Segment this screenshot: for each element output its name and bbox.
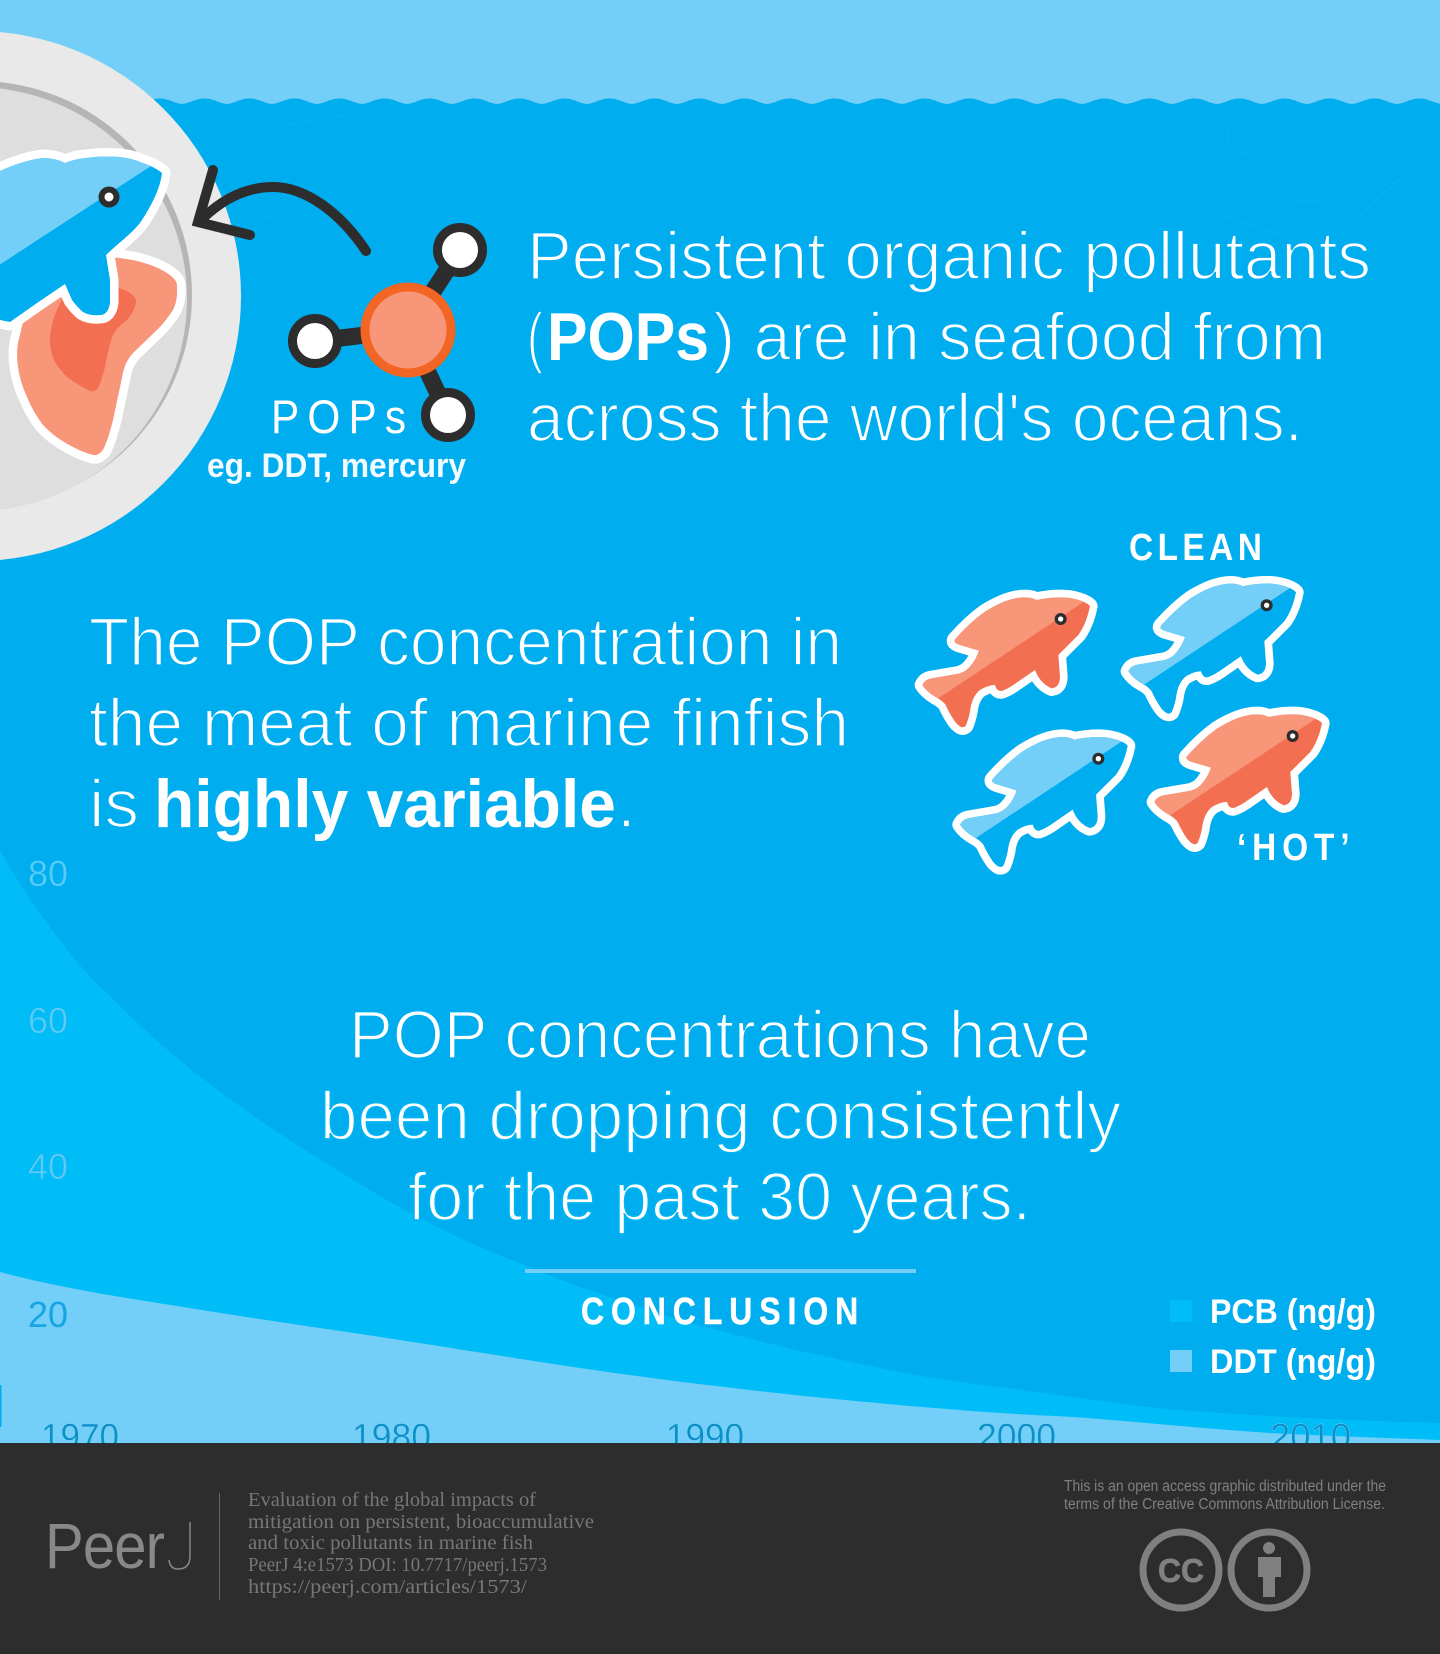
text block: highly variable: highly variable [154,766,616,842]
text block: dropping concentrations: been dropping consistently [320,1078,1121,1154]
license note [1064,1478,1386,1513]
text block: highly variable: . [617,766,636,842]
y axis labels: 40 [28,1146,68,1187]
citation: PeerJ 4:e1573 DOI: 10.7717/peerj.1573 [248,1554,547,1576]
legend DDT swatch [1170,1350,1192,1372]
plate inner shadow [0,81,192,509]
footer divider [219,1493,220,1600]
text block: highly variable: is [89,766,139,842]
icon: attribution person [1231,1532,1307,1608]
legend PCB label: PCB (ng/g) [1210,1293,1376,1331]
text block: POPs in seafood: ) are in seafood from [713,299,1326,375]
text block: dropping concentrations: POP concentrations have [349,997,1091,1073]
text block: POPs in seafood: Persistent organic pollutants [527,218,1371,294]
red fish top left [914,590,1098,735]
fish on plate [0,148,170,330]
arrow from POPs to plate [198,170,366,251]
text block: highly variable: The POP concentration in [89,604,842,680]
x axis labels: 2000 [977,1416,1056,1457]
text block: POPs in seafood: POPs [547,299,709,375]
text block: POPs in seafood [527,218,1371,456]
x axis labels: 1980 [352,1416,431,1457]
plate with fish steak [0,31,241,561]
text block: highly variable [89,604,849,842]
text block: dropping concentrations: for the past 30 years. [408,1159,1031,1235]
conclusion heading: CONCLUSION [581,1290,858,1333]
y axis labels: 60 [28,1000,68,1041]
conclusion rule [525,1269,916,1273]
plate well [0,87,187,511]
icon: creative commons: CC [1158,1552,1204,1589]
POPs label: POPs [271,392,406,444]
chart legend [1170,1293,1376,1381]
fish steak [17,257,177,455]
footer band [0,1443,1440,1654]
y axis labels: 20 [28,1294,68,1335]
label: hot: ‘HOT’ [1237,826,1350,868]
legend PCB swatch [1170,1300,1192,1322]
x axis labels: 1970 [41,1416,119,1457]
text block: dropping concentrations [320,997,1121,1235]
PeerJ logo: Peer [45,1510,165,1582]
x axis labels [44,1423,1350,1443]
PCB area [0,850,1440,1443]
plate rim [0,31,241,561]
DDT area [0,1272,1440,1443]
citation [248,1489,594,1598]
text block: highly variable: the meat of marine finfish [89,685,849,761]
citation: https://peerj.com/articles/1573/ [248,1576,527,1598]
POPs examples: eg. DDT, mercury [207,447,466,485]
y axis labels: 80 [28,853,68,894]
citation: and toxic pollutants in marine fish [248,1532,533,1554]
label: clean: CLEAN [1129,526,1262,568]
red fish bottom right [1146,706,1330,852]
license note: terms of the Creative Commons Attribution License. [1064,1496,1385,1513]
icon: creative commons [1143,1532,1219,1608]
text block: POPs in seafood: across the world's oceans. [527,380,1303,456]
fish group: clean and hot [914,576,1330,875]
license note: This is an open access graphic distributed under the [1064,1478,1386,1495]
area chart: POP decline 1970-2010 [0,850,1440,1457]
citation: mitigation on persistent, bioaccumulative [248,1511,594,1533]
y axis labels [28,853,68,1335]
citation: Evaluation of the global impacts of [248,1489,536,1511]
POPs molecule icon [292,228,482,438]
blue fish bottom left [952,729,1136,875]
sky band [0,0,1440,106]
x axis labels: 2010 [1270,1416,1351,1457]
x axis labels: 1990 [666,1416,744,1457]
legend DDT label: DDT (ng/g) [1210,1343,1376,1381]
blue fish top right [1120,576,1304,722]
text block: POPs in seafood: ( [527,299,543,375]
